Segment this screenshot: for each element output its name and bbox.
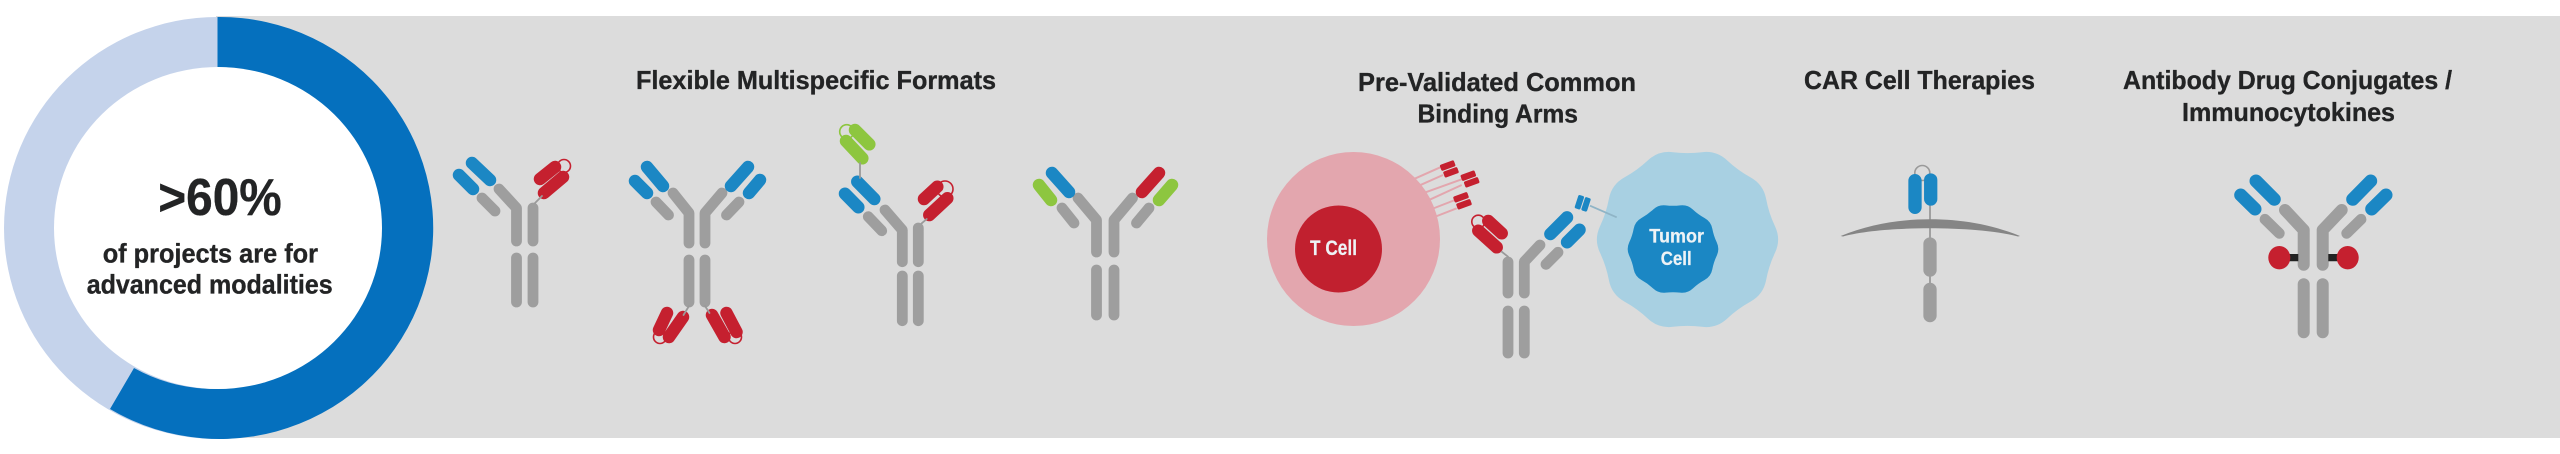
icon: bispecific antibody with scFv arm [459, 160, 570, 302]
heading: Antibody Drug Conjugates / Immunocytokines: Immunocytokines [2182, 97, 2395, 127]
illustration: T cell with receptors [1267, 152, 1480, 326]
light chains [2265, 219, 2361, 233]
drug payloads [2268, 246, 2359, 269]
tumor antigen stalk [1590, 206, 1617, 217]
scFv domains [1915, 180, 1931, 207]
donut value arc [110, 17, 433, 439]
donut stat text [87, 169, 333, 299]
donut chart: over 60 percent [4, 17, 433, 439]
intracellular domains [1923, 244, 1937, 316]
heading: Antibody Drug Conjugates / Immunocytokines: Antibody Drug Conjugates / [2123, 65, 2452, 95]
tumor antigen [1574, 195, 1591, 212]
tumor cell body [1597, 152, 1778, 327]
heading: Pre-Validated Common Binding Arms [1358, 67, 1636, 128]
T cell label: T Cell [1310, 237, 1357, 260]
heading: Pre-Validated Common Binding Arms: Pre-Validated Common [1358, 67, 1636, 97]
tumor nucleus [1628, 205, 1718, 293]
heading: Antibody Drug Conjugates / Immunocytokines [2123, 65, 2452, 127]
icon: antibody drug conjugate [2241, 181, 2386, 332]
icon: trispecific antibody with green scFv on top [840, 125, 953, 321]
stat caption line 1: of projects are for [103, 238, 318, 268]
icon: tetravalent blue-green-red-green antibody [1039, 173, 1172, 315]
tumor cell label: Cell [1661, 248, 1692, 270]
membrane [1841, 219, 2020, 236]
heading: Pre-Validated Common Binding Arms: Binding Arms [1418, 98, 1578, 128]
transmembrane line and scFv linker [1929, 200, 1931, 284]
illustration: tumor cell with antigen [1574, 152, 1778, 327]
drug linkers [2289, 254, 2338, 261]
stat value: >60% [158, 169, 282, 227]
donut track [4, 17, 431, 439]
donut hole [54, 67, 382, 389]
icon: antibody with C-terminal scFv pair [635, 167, 760, 344]
icon: central bispecific antibody [1472, 215, 1580, 353]
T cell receptor blocks [1440, 160, 1480, 210]
tumor cell label [1649, 226, 1704, 270]
heading: Flexible Multispecific Formats: Flexible Multispecific Formats [636, 65, 996, 95]
scFv hinge loop [1915, 166, 1930, 180]
T cell body [1267, 152, 1440, 326]
tumor cell label: Tumor [1649, 226, 1704, 248]
icon: CAR receptor across membrane [1841, 166, 2020, 316]
binding domains [2241, 181, 2386, 209]
heading: CAR Cell Therapies: CAR Cell Therapies [1804, 65, 2035, 95]
T cell receptor stalks [1413, 167, 1462, 219]
T cell nucleus [1295, 206, 1382, 292]
stat caption line 2: advanced modalities [87, 269, 333, 299]
